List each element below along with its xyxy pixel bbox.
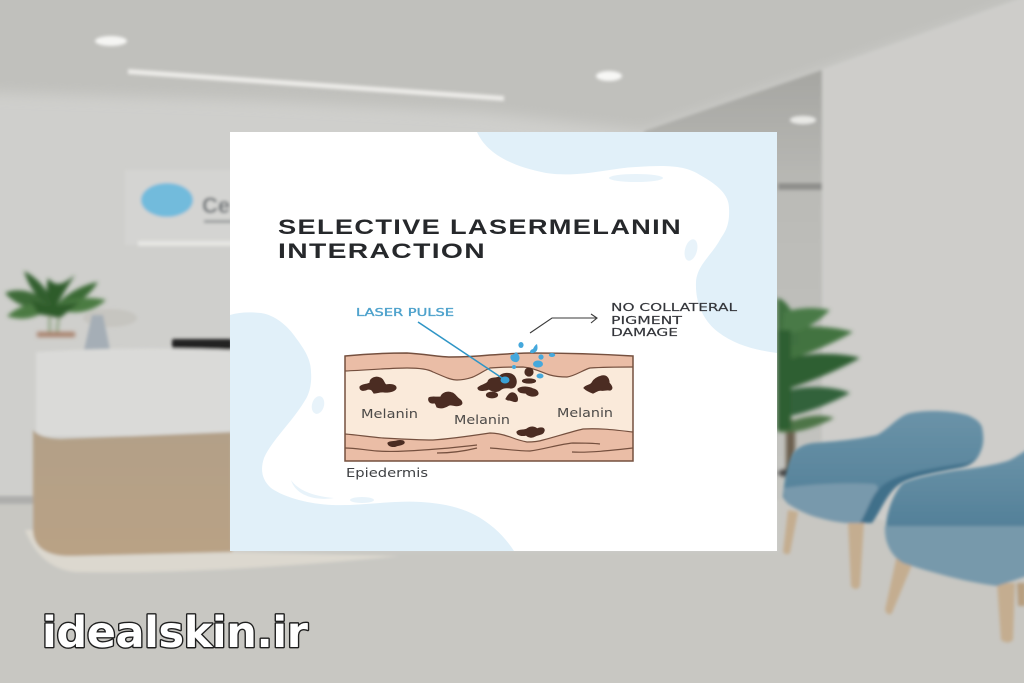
arrow to callout <box>530 314 597 333</box>
title: SELECTIVE LASERMELANIN <box>278 216 682 239</box>
melanin labels: Melanin <box>361 406 418 421</box>
ceiling <box>0 0 1024 131</box>
reception sign with logo <box>125 170 238 246</box>
right potted plant <box>777 298 860 477</box>
watermark: idealskin.ir <box>42 608 309 658</box>
ceiling lights <box>95 36 622 101</box>
title: INTERACTION <box>278 240 486 263</box>
label: epidermis: Epiedermis <box>346 465 428 480</box>
callout: no collateral pigment damage: PIGMENT <box>611 314 682 327</box>
diagram: skin cross-section <box>345 353 633 461</box>
desk lamp <box>83 309 137 350</box>
callout: no collateral pigment damage: NO COLLATERAL <box>611 301 738 314</box>
droplets <box>510 342 555 378</box>
back recess <box>644 70 822 500</box>
melanin labels: Melanin <box>557 405 613 420</box>
blue armchair right <box>885 448 1024 642</box>
left potted plant <box>5 271 106 337</box>
blob: bottom left <box>230 312 514 551</box>
melanin labels: Melanin <box>454 412 510 427</box>
blob: top right <box>477 132 777 353</box>
laser beam <box>418 322 510 384</box>
blob highlights <box>291 174 700 503</box>
callout: no collateral pigment damage <box>611 301 738 339</box>
blue armchair left <box>783 411 983 589</box>
reception desk <box>25 348 400 572</box>
floor <box>0 500 1024 683</box>
title <box>278 216 682 263</box>
melanin clusters <box>360 368 612 446</box>
reception sign with logo: Ce <box>202 193 230 218</box>
callout: no collateral pigment damage: DAMAGE <box>611 326 678 339</box>
panel: infographic card <box>230 132 777 551</box>
melanin labels <box>361 405 613 427</box>
right wall <box>822 0 1024 560</box>
label: laser pulse: LASER PULSE <box>356 306 454 319</box>
